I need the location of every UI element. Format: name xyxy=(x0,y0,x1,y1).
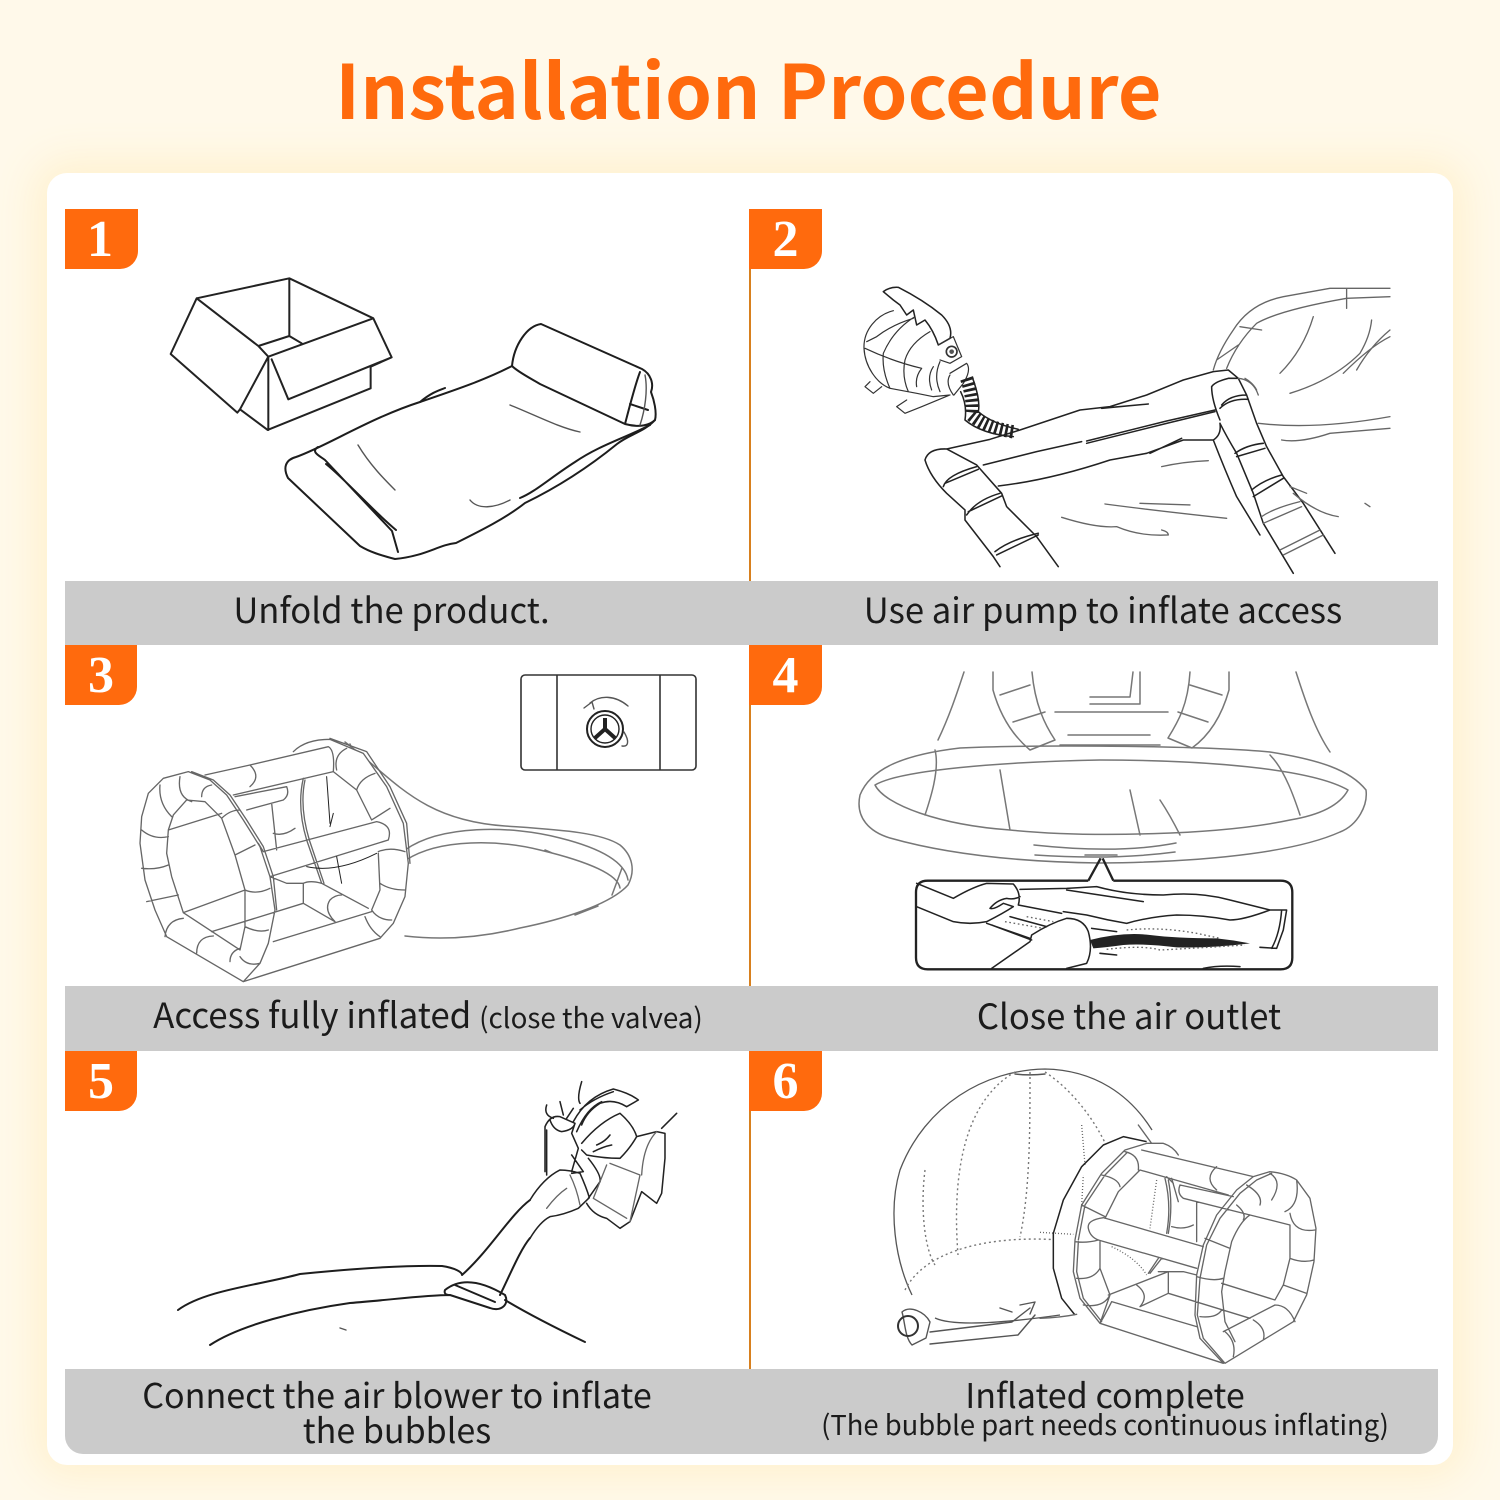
badge: step 5: 5 xyxy=(88,1053,114,1110)
caption bar 2 xyxy=(65,986,1438,1051)
step 2 illustration: air pump inflating tube xyxy=(864,287,1390,573)
caption: step 4: Close the air outlet xyxy=(977,989,1281,1039)
caption: step 5 xyxy=(142,1368,652,1453)
badge: step 6: 6 xyxy=(772,1053,798,1110)
badge: step 4 xyxy=(749,645,822,705)
badge: step 4: 4 xyxy=(772,647,798,704)
caption: step 1: Unfold the product. xyxy=(233,583,550,633)
caption: step 6: Inflated complete xyxy=(965,1368,1245,1418)
step 6 illustration: inflated bubble with access tunnel xyxy=(894,1069,1316,1363)
badge: step 3 xyxy=(65,645,137,705)
badge: step 2 xyxy=(749,209,822,269)
caption: step 2: Use air pump to inflate access xyxy=(864,583,1342,633)
caption: step 3: Access fully inflated (close the valvea) xyxy=(153,989,703,1039)
step 1 illustration: box and folded product xyxy=(171,278,656,559)
title: Installation Procedure xyxy=(335,32,1162,141)
badge: step 3: 3 xyxy=(88,647,114,704)
badge: step 5 xyxy=(65,1051,137,1111)
caption bar 1 xyxy=(65,581,1438,645)
caption: step 6 xyxy=(821,1368,1389,1443)
badge: step 6 xyxy=(749,1051,822,1111)
caption: step 6: (The bubble part needs continuous inflating) xyxy=(821,1403,1389,1443)
badge: step 1 xyxy=(65,209,138,269)
caption: step 5: Connect the air blower to inflate xyxy=(142,1368,652,1418)
step 3 illustration: inflated access tunnel and valve inset xyxy=(140,675,696,982)
caption: step 5: the bubbles xyxy=(303,1403,491,1453)
badge: step 2: 2 xyxy=(772,211,798,268)
caption bar 3 xyxy=(65,1369,1438,1454)
pump hose xyxy=(961,378,1018,437)
badge: step 1: 1 xyxy=(87,211,113,268)
step 4 illustration: close the air outlet xyxy=(859,672,1366,969)
step 5 illustration: connecting air blower xyxy=(178,1082,677,1345)
